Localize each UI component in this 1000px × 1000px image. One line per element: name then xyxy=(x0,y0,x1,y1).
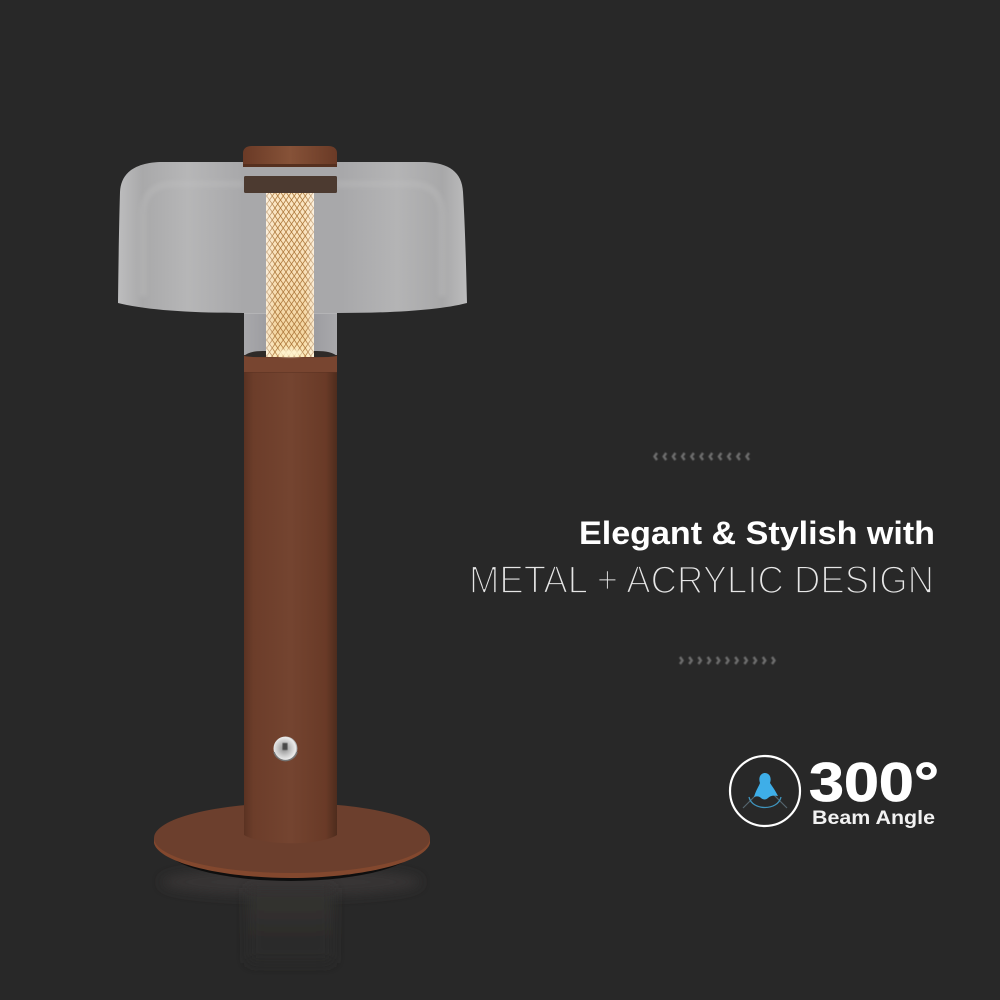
stem top rim xyxy=(244,356,337,372)
chevron divider top xyxy=(654,453,749,460)
heading: Elegant & Stylish with xyxy=(579,515,935,551)
dark lower ring xyxy=(244,176,337,193)
shade bottom line xyxy=(244,313,337,314)
chevron divider bottom xyxy=(680,657,774,664)
stem collar line xyxy=(244,371,337,372)
beam angle value: 300° xyxy=(809,751,939,813)
table lamp xyxy=(118,146,467,963)
icon: beam angle xyxy=(730,756,800,826)
acrylic shade xyxy=(118,162,467,313)
lamp reflection xyxy=(161,868,421,963)
lamp base disc xyxy=(154,803,430,881)
glass tube xyxy=(244,190,337,355)
subheading: METAL + ACRYLIC DESIGN xyxy=(469,559,934,602)
top cap xyxy=(243,146,337,167)
shade inner edges xyxy=(143,184,442,296)
touch button xyxy=(274,736,298,761)
lamp stem xyxy=(244,352,337,843)
tube dark floor xyxy=(244,351,337,357)
glowing mesh cylinder xyxy=(266,192,314,357)
beam angle label: Beam Angle xyxy=(812,807,935,829)
